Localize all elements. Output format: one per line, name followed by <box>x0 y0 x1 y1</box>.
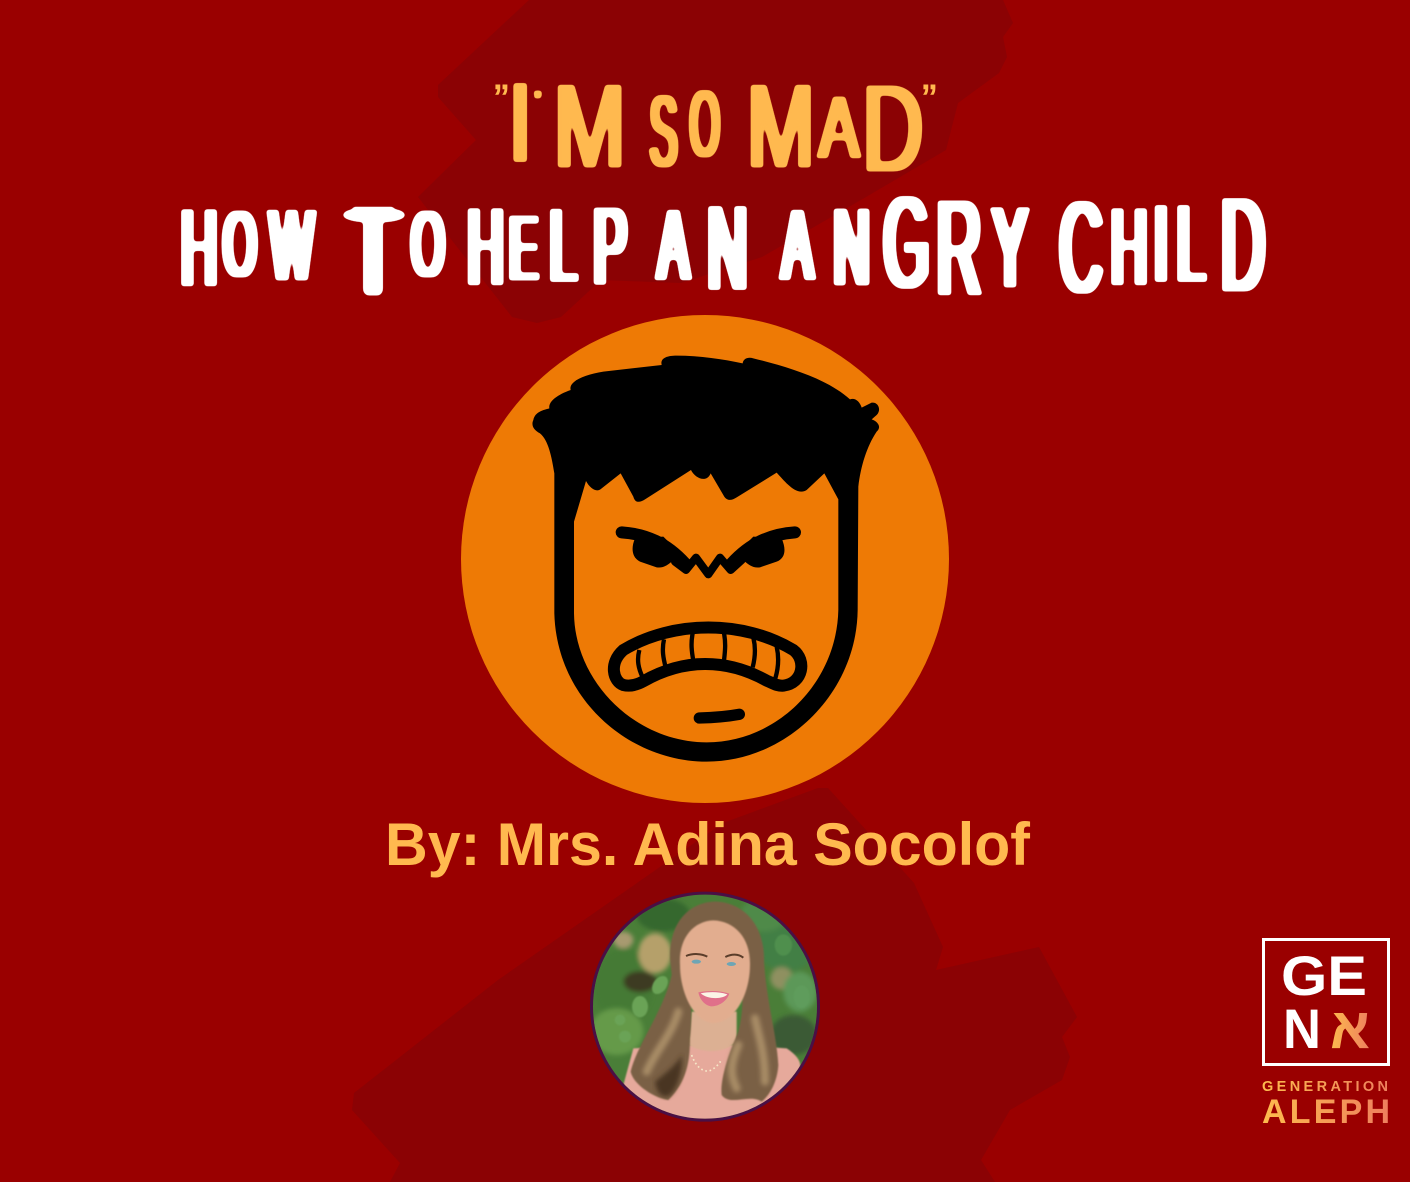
chin <box>699 714 739 718</box>
face area <box>574 470 838 742</box>
title line 1: I'M SO MAD: I <box>509 59 532 186</box>
logo wordmark: GENERATION: GENERATION <box>1262 1079 1388 1095</box>
logo letters GE: GE <box>1281 944 1367 1007</box>
orange circle <box>461 315 949 803</box>
icon: angry face <box>532 356 879 762</box>
hair and head outline <box>532 356 879 762</box>
snarling mouth <box>614 627 801 686</box>
title line 1: I'M SO MAD: O <box>690 72 720 177</box>
title line 1: I'M SO MAD: M <box>747 60 814 193</box>
title line 1: I'M SO MAD: A <box>819 79 860 177</box>
sweater <box>623 1045 800 1125</box>
title line 1: I'M SO MAD <box>494 59 937 198</box>
title line 1: I'M SO MAD: ’ <box>535 85 540 119</box>
logo aleph: א <box>1330 996 1370 1061</box>
title line 2: HOW TO HELP AN ANGRY CHILD: HOW TO HELP AN ANGRY CHILD <box>181 171 1265 324</box>
hair <box>631 902 778 1102</box>
title line 1: I'M SO MAD: S <box>650 76 677 188</box>
bottom brush stroke <box>352 788 1077 1182</box>
necklace <box>692 1055 721 1071</box>
title line 1: I'M SO MAD: ” <box>922 76 937 125</box>
angry eyes and brows <box>622 532 795 574</box>
eyes, brows and smile <box>686 954 743 1006</box>
logo letter N: N <box>1283 997 1321 1060</box>
top brush stroke <box>418 0 1013 323</box>
title line 1: I'M SO MAD: ” <box>494 76 509 125</box>
face <box>680 920 750 1023</box>
neck <box>688 1012 737 1051</box>
byline: By: Mrs. Adina Socolof <box>385 811 1031 878</box>
title line 1: I'M SO MAD: D <box>862 61 923 198</box>
foliage background <box>593 894 817 1119</box>
author portrait <box>590 892 820 1122</box>
logo wordmark: ALEPH: ALEPH <box>1262 1093 1390 1131</box>
title line 1: I'M SO MAD: M <box>554 61 626 194</box>
logo: Generation Aleph <box>1262 940 1390 1131</box>
